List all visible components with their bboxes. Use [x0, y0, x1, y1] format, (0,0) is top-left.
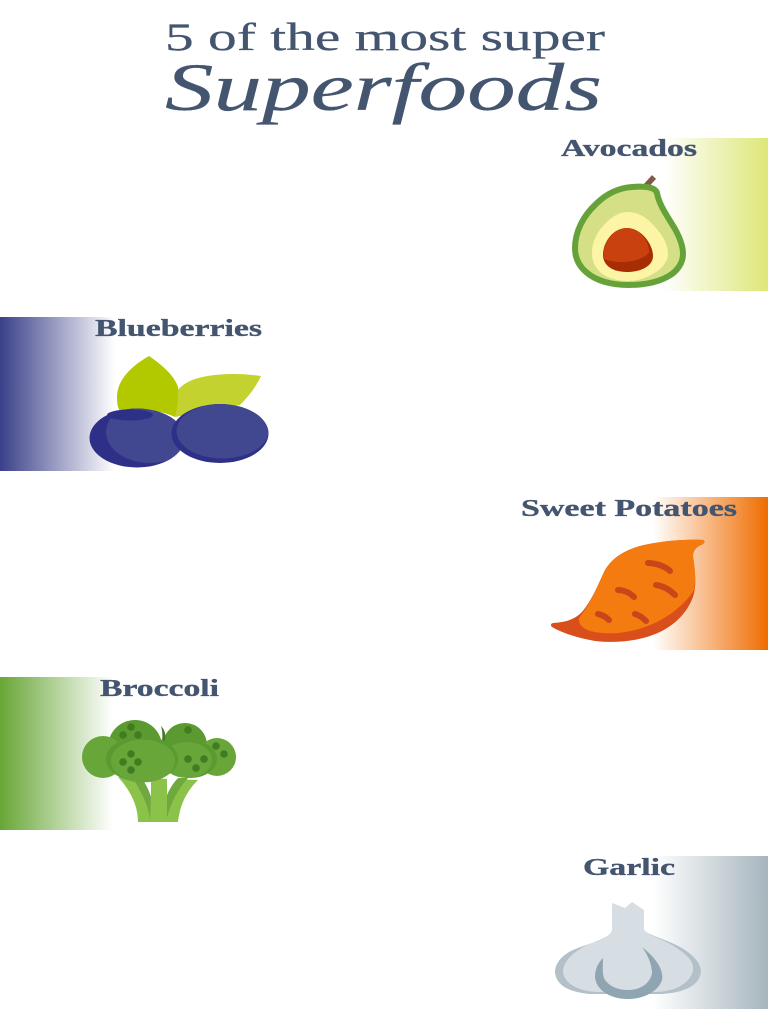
- title line one: 5 of the most super: [165, 16, 605, 59]
- title: [165, 16, 605, 125]
- icon: avocado: [575, 177, 683, 285]
- label: Sweet Potatoes: [521, 496, 737, 522]
- title line two: Superfoods: [165, 49, 602, 125]
- panel: broccoli: [0, 676, 236, 830]
- label: Broccoli: [100, 676, 219, 702]
- label: Garlic: [583, 855, 675, 881]
- panel: blueberries: [0, 316, 268, 471]
- label: Avocados: [561, 136, 697, 162]
- gradient band: [653, 856, 768, 1009]
- icon: blueberries: [90, 356, 268, 468]
- gradient band: [0, 677, 113, 830]
- icon: broccoli: [82, 720, 236, 822]
- panel: avocados: [561, 136, 768, 291]
- gradient band: [0, 317, 115, 471]
- gradient band: [664, 138, 768, 291]
- panel: sweet potatoes: [521, 496, 768, 650]
- label: Blueberries: [95, 316, 262, 342]
- icon: garlic: [555, 902, 701, 999]
- icon: sweet potato: [551, 540, 704, 642]
- panel: garlic: [555, 855, 768, 1009]
- gradient band: [653, 497, 768, 650]
